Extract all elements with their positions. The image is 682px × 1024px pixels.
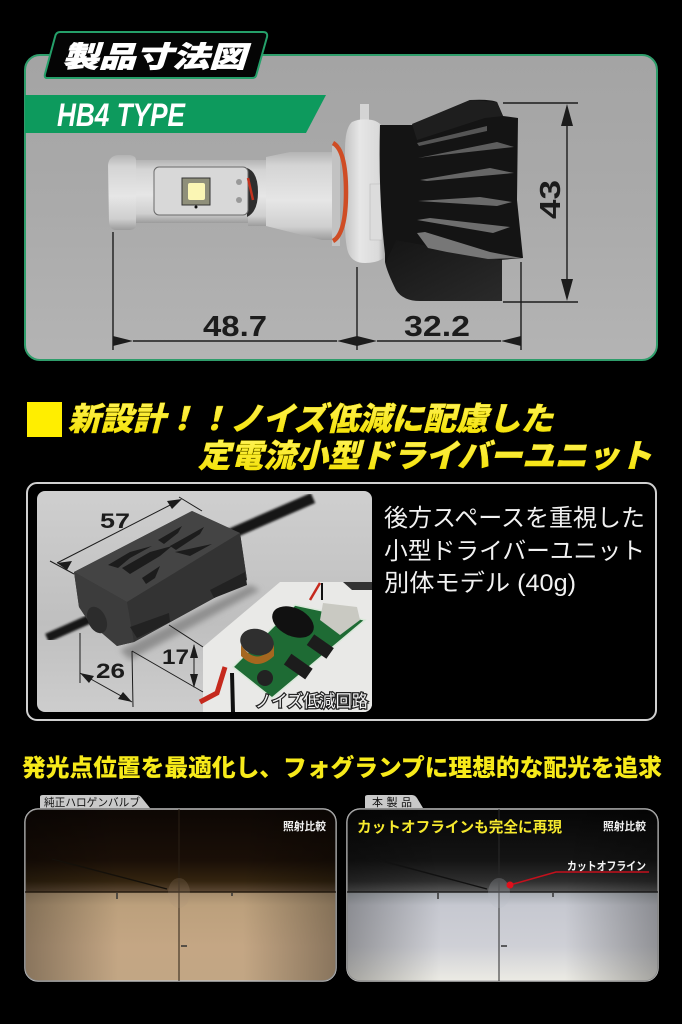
description text: 後方スペースを重視した [384, 505, 645, 532]
tagline: 発光点位置を最適化し、フォグランプに理想的な配光を追求 [22, 754, 662, 782]
banner: HB4 type [25, 95, 326, 133]
banner: HB4 type: HB4 TYPE [57, 97, 186, 133]
title tab: 製品寸法図 [62, 42, 252, 74]
label: comparison: 照射比較 [283, 819, 326, 833]
circuit inset [203, 582, 372, 712]
O-ring [333, 143, 346, 241]
tab: this product: 本製品 [372, 795, 412, 809]
dimension: 57: 57 [100, 510, 130, 533]
label: comparison: 照射比較 [603, 819, 646, 833]
heading: new design driver unit [27, 401, 652, 474]
tab: this product [365, 795, 423, 809]
heading: new design driver unit: 新設計！！ノイズ低減に配慮した [68, 401, 554, 437]
label: noise reduction circuit: ノイズ低減回路 [255, 692, 368, 711]
panel: product dimensions [25, 32, 657, 360]
LED chip plate [154, 167, 248, 215]
heading: new design driver unit: 定電流小型ドライバーユニット [198, 438, 652, 474]
grommet [87, 606, 107, 634]
panel: halogen beam comparison [25, 795, 336, 981]
title tab [45, 32, 267, 78]
panel: driver unit [27, 483, 656, 720]
panel: product beam comparison [347, 795, 658, 981]
dimension: 17: 17 [162, 646, 189, 669]
callout: cut-off line: カットオフライン [567, 860, 646, 873]
LED holder [136, 160, 150, 223]
heat sink fins [417, 126, 487, 146]
beam image: halogen [25, 809, 336, 981]
callout: cut-off line [506, 860, 649, 888]
dimension: 26: 26 [96, 660, 125, 683]
box shadow [120, 585, 260, 660]
yellow square [27, 402, 62, 437]
photo: driver unit [37, 491, 372, 712]
dimension: 32.2: 32.2 [404, 311, 470, 343]
logo cutouts [108, 526, 212, 584]
beam image: product [347, 809, 658, 981]
illustration: LED bulb [108, 100, 523, 301]
description text: 小型ドライバーユニット [384, 538, 645, 565]
bulb cylinder [266, 152, 332, 240]
description text [384, 505, 645, 597]
dimension: 43: 43 [535, 180, 567, 219]
description text: 別体モデル (40g) [384, 570, 576, 597]
heat sink [380, 100, 523, 262]
caption: cut-off line reproduced: カットオフラインも完全に再現 [357, 818, 562, 836]
driver box [74, 511, 247, 646]
dimension: 48.7: 48.7 [203, 311, 267, 343]
bulb tip cap [108, 155, 136, 230]
cables [228, 498, 313, 535]
side tabs [210, 572, 247, 598]
driver block [385, 240, 502, 301]
dimension lines [113, 103, 578, 350]
tab: halogen: 純正ハロゲンバルブ [44, 795, 140, 809]
flange [360, 104, 369, 120]
dimension lines: driver [50, 497, 203, 707]
